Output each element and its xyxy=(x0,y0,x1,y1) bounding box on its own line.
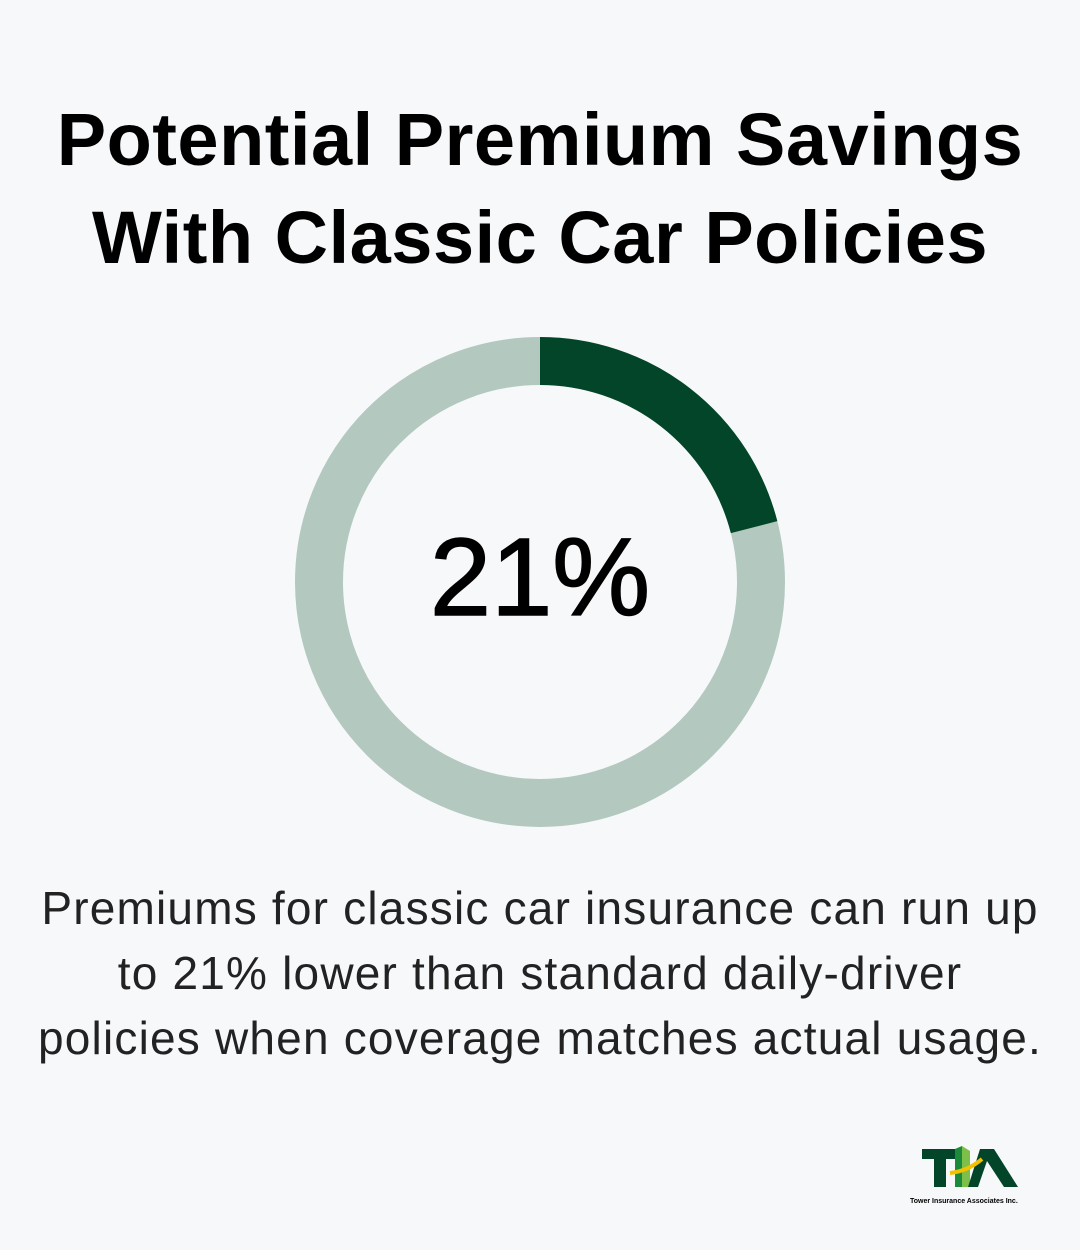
title: With Classic Car Policies xyxy=(92,196,988,279)
title xyxy=(57,98,1023,279)
body text: to 21% lower than standard daily-driver xyxy=(118,947,962,999)
donut chart: 21% xyxy=(430,516,650,639)
logo: Tower Insurance Associates Inc. xyxy=(910,1198,1018,1205)
logo xyxy=(910,1146,1018,1205)
body text: policies when coverage matches actual usage. xyxy=(38,1012,1042,1064)
title: Potential Premium Savings xyxy=(57,98,1023,181)
body text xyxy=(38,882,1042,1064)
body text: Premiums for classic car insurance can run up xyxy=(41,882,1039,934)
